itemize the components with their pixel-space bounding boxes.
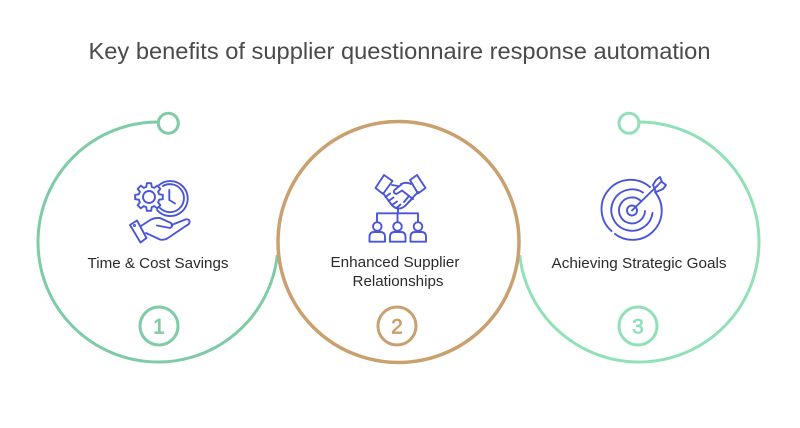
- panel: time and cost savings: [38, 113, 277, 362]
- number badge 3: [619, 307, 657, 345]
- panel: achieving strategic goals: [520, 113, 759, 362]
- label: Time & Cost Savings: [88, 256, 228, 272]
- ring 1 marker: [158, 113, 178, 133]
- ring 2: [278, 122, 519, 362]
- number badge 2: [378, 307, 416, 345]
- label: Relationships: [352, 274, 444, 290]
- number badge 3: 3: [632, 316, 644, 338]
- label: Enhanced Supplier: [330, 255, 460, 271]
- icon: target and arrow: [602, 177, 666, 240]
- icon: handshake and org chart: [370, 175, 426, 242]
- panel: enhanced supplier relationships: [278, 122, 519, 362]
- icon: gear, clock and hand: [130, 181, 190, 242]
- title: Key benefits of supplier questionnaire response automation: [88, 38, 710, 64]
- label: Achieving Strategic Goals: [552, 256, 726, 272]
- ring 1: [38, 122, 277, 362]
- number badge 1: 1: [153, 316, 165, 338]
- ring 3: [520, 122, 759, 362]
- number badge 1: [140, 307, 178, 345]
- number badge 2: 2: [391, 316, 403, 338]
- ring 3 marker: [619, 113, 639, 133]
